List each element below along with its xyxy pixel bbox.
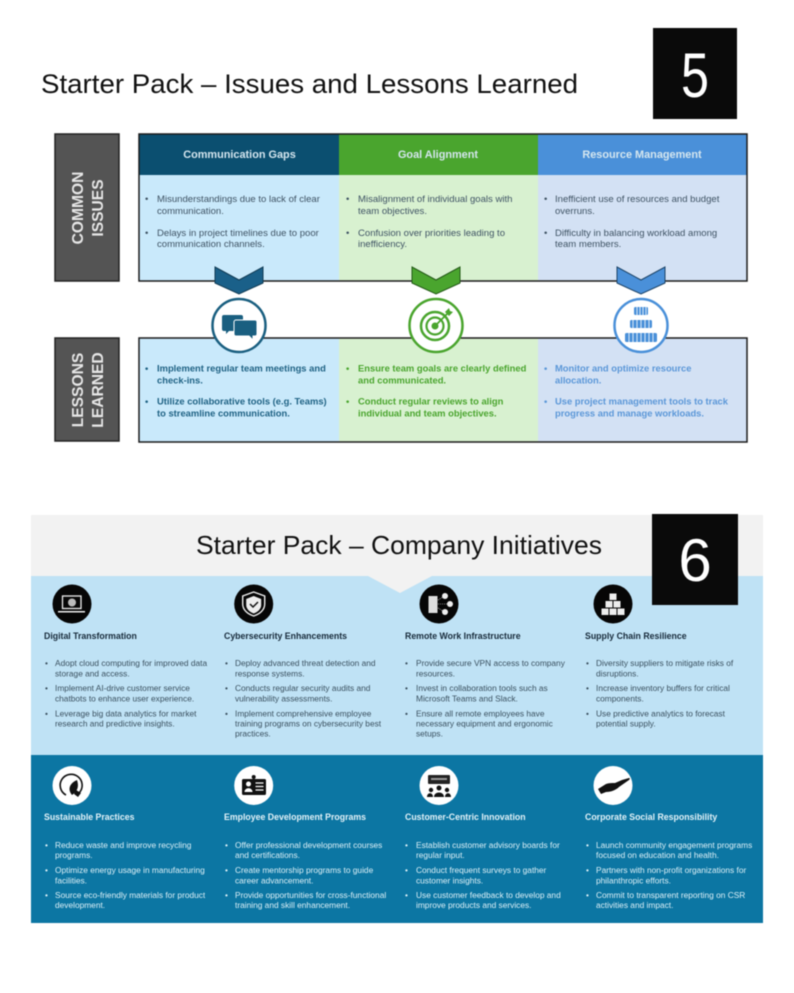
column: goal alignment: Misalignment of individual goals with xyxy=(358,194,512,205)
column: communication gaps: Misunderstandings due to lack of clear xyxy=(157,194,321,205)
panel: lessons learned side label: LESSONS xyxy=(70,353,87,427)
initiative: digital transformation: chatbots to enhance user experience. xyxy=(55,694,194,704)
number badge 5 xyxy=(653,28,737,119)
panel: common issues side label xyxy=(55,134,119,281)
initiative: sustainable practices: Reduce waste and improve recycling xyxy=(55,840,192,850)
initiative: employee development programs: Provide opportunities for cross-functional xyxy=(235,890,386,900)
initiative: remote work infrastructure: • xyxy=(405,658,408,668)
column: resource management: Resource Management xyxy=(582,149,702,161)
initiative: sustainable practices: Source eco-friendly materials for product xyxy=(55,890,206,900)
number badge 6 xyxy=(652,514,738,605)
column: goal alignment: • xyxy=(346,194,349,205)
initiative: digital transformation: research and predictive insights. xyxy=(55,718,175,728)
initiative: cybersecurity enhancements: training programs on cybersecurity best xyxy=(235,718,382,728)
panel: common issues side label: ISSUES xyxy=(90,179,107,237)
initiative: remote work infrastructure: • xyxy=(405,708,408,718)
initiative: sustainable practices: • xyxy=(45,840,48,850)
initiative: customer-centric innovation: Establish customer advisory boards for xyxy=(416,840,560,850)
column: resource management: • xyxy=(544,194,547,205)
initiative: employee development programs: training and skill enhancement. xyxy=(235,900,350,910)
column: communication lessons: check-ins. xyxy=(157,374,203,386)
initiative: supply chain resilience: Increase inventory buffers for critical xyxy=(596,683,730,693)
initiative: supply chain resilience: disruptions. xyxy=(596,668,639,678)
initiative: supply chain resilience: potential supply. xyxy=(596,718,656,728)
column: goal alignment: team objectives. xyxy=(358,206,427,217)
initiative: digital transformation: • xyxy=(45,708,48,718)
initiative: remote work infrastructure: Microsoft Teams and Slack. xyxy=(416,694,518,704)
panel: dark teal initiatives row xyxy=(31,755,763,923)
column: resource lessons: allocation. xyxy=(555,374,601,386)
initiative: corporate social responsibility: • xyxy=(586,840,589,850)
column: communication lessons: Utilize collaborative tools (e.g. Teams) xyxy=(157,396,327,406)
initiative: employee development programs: Employee Development Programs xyxy=(224,812,366,822)
initiative: remote work infrastructure: Ensure all remote employees have xyxy=(416,708,545,718)
initiative: employee development programs xyxy=(224,766,386,910)
column: goal lessons: individual and team objectives. xyxy=(358,408,497,418)
initiative: cybersecurity enhancements: • xyxy=(225,708,228,718)
initiative: supply chain resilience: Use predictive analytics to forecast xyxy=(596,708,726,718)
column: communication lessons: to streamline communication. xyxy=(157,408,290,418)
initiative: customer-centric innovation: Customer-Centric Innovation xyxy=(405,812,526,822)
initiative: supply chain resilience: • xyxy=(586,683,589,693)
initiative: cybersecurity enhancements: practices. xyxy=(235,728,271,738)
initiative: corporate social responsibility: activities and impact. xyxy=(596,900,673,910)
initiative: remote work infrastructure: resources. xyxy=(416,668,455,678)
initiative: sustainable practices: • xyxy=(45,865,48,875)
column: resource management: • xyxy=(544,228,547,239)
initiative: sustainable practices: programs. xyxy=(55,850,93,860)
panel: company initiatives header band xyxy=(31,515,763,576)
initiative: sustainable practices: facilities. xyxy=(55,876,87,886)
initiative: employee development programs: career advancement. xyxy=(235,876,313,886)
column: goal alignment xyxy=(339,134,538,281)
column: communication gaps: Delays in project timelines due to poor xyxy=(157,228,320,239)
initiative: cybersecurity enhancements: Conducts regular security audits and xyxy=(235,683,371,693)
initiative: supply chain resilience: • xyxy=(586,658,589,668)
column: resource lessons: Use project management tools to track xyxy=(555,396,729,406)
initiative: employee development programs: • xyxy=(225,840,228,850)
column: communication gaps: • xyxy=(145,194,148,205)
column: goal alignment: Goal Alignment xyxy=(398,149,478,161)
initiative: customer-centric innovation: regular input. xyxy=(416,850,465,860)
initiative: remote work infrastructure: necessary equipment and ergonomic xyxy=(416,718,553,728)
initiative: supply chain resilience xyxy=(585,584,734,728)
number badge 6: 6 xyxy=(678,527,712,594)
column: communication gaps: • xyxy=(145,228,148,239)
initiative: customer-centric innovation: improve products and services. xyxy=(416,900,531,910)
initiative: customer-centric innovation: • xyxy=(405,865,408,875)
initiative: remote work infrastructure: Invest in collaboration tools such as xyxy=(416,683,548,693)
column: resource lessons: • xyxy=(544,396,547,406)
column: goal lessons xyxy=(339,338,538,442)
initiative: supply chain resilience: • xyxy=(586,708,589,718)
initiative: corporate social responsibility: Launch community engagement programs xyxy=(596,840,752,850)
column: resource management: Inefficient use of resources and budget xyxy=(555,194,720,205)
column: resource lessons: Monitor and optimize resource xyxy=(555,362,691,374)
initiative: customer-centric innovation: Conduct frequent surveys to gather xyxy=(416,865,547,875)
column: goal alignment: Confusion over priorities leading to xyxy=(358,228,505,239)
title: issues and lessons learned: Starter Pack – Issues and Lessons Learned xyxy=(41,69,578,99)
initiative: sustainable practices xyxy=(44,766,206,910)
initiative: sustainable practices: • xyxy=(45,890,48,900)
column: communication lessons: • xyxy=(145,396,148,406)
column: goal lessons: Conduct regular reviews to align xyxy=(358,396,504,406)
number badge 5: 5 xyxy=(681,41,709,111)
column: goal alignment: inefficiency. xyxy=(358,239,407,250)
column: resource lessons xyxy=(538,338,747,442)
initiative: supply chain resilience: Supply Chain Resilience xyxy=(585,631,687,641)
column: communication gaps: communication. xyxy=(157,206,224,217)
initiative: digital transformation: storage and access. xyxy=(55,668,130,678)
initiative: cybersecurity enhancements: • xyxy=(225,658,228,668)
initiative: digital transformation: • xyxy=(45,683,48,693)
initiative: corporate social responsibility: • xyxy=(586,890,589,900)
initiative: digital transformation: • xyxy=(45,658,48,668)
initiative: customer-centric innovation: customer insights. xyxy=(416,876,483,886)
column: resource lessons: progress and manage workloads. xyxy=(555,408,704,418)
icon: chat bubbles xyxy=(212,299,266,352)
initiative: cybersecurity enhancements: • xyxy=(225,683,228,693)
title: company initiatives: Starter Pack – Company Initiatives xyxy=(196,530,602,560)
initiative: digital transformation: Implement AI-drive customer service xyxy=(55,683,190,693)
column: communication lessons xyxy=(139,338,340,442)
column: resource management: overruns. xyxy=(555,206,595,217)
column: goal lessons: • xyxy=(346,362,349,374)
initiative: customer-centric innovation xyxy=(405,766,561,910)
arrow: goal chevron xyxy=(412,267,460,294)
column: resource lessons: • xyxy=(544,362,547,374)
initiative: customer-centric innovation: • xyxy=(405,840,408,850)
panel: lessons learned side label xyxy=(55,338,119,441)
initiative: remote work infrastructure: Remote Work Infrastructure xyxy=(405,631,521,641)
initiative: employee development programs: Offer professional development courses xyxy=(235,840,382,850)
column: resource management: Difficulty in balancing workload among xyxy=(555,228,717,239)
icon: people pyramid xyxy=(614,299,668,352)
initiative: digital transformation: Adopt cloud computing for improved data xyxy=(55,658,207,668)
arrow: communication chevron xyxy=(215,267,263,294)
initiative: remote work infrastructure: • xyxy=(405,683,408,693)
initiative: sustainable practices: Sustainable Practices xyxy=(44,812,135,822)
column: communication lessons: Implement regular team meetings and xyxy=(157,362,326,374)
initiative: digital transformation: Digital Transformation xyxy=(44,631,137,641)
initiative: corporate social responsibility: • xyxy=(586,865,589,875)
initiative: corporate social responsibility: focused on education and health. xyxy=(596,850,719,860)
initiative: remote work infrastructure xyxy=(405,584,566,738)
initiative: employee development programs: and certifications. xyxy=(235,850,300,860)
initiative: digital transformation: Leverage big data analytics for market xyxy=(55,708,197,718)
initiative: customer-centric innovation: Use customer feedback to develop and xyxy=(416,890,561,900)
arrow: resource chevron xyxy=(617,267,665,294)
column: resource management: team members. xyxy=(555,239,621,250)
panel: lessons learned side label: LEARNED xyxy=(90,352,107,428)
initiative: cybersecurity enhancements: Implement comprehensive employee xyxy=(235,708,372,718)
initiative: supply chain resilience: components. xyxy=(596,694,644,704)
initiative: employee development programs: • xyxy=(225,865,228,875)
column: goal alignment: • xyxy=(346,228,349,239)
initiative: corporate social responsibility xyxy=(585,766,752,910)
initiative: employee development programs: Create mentorship programs to guide xyxy=(235,865,374,875)
panel: light blue initiatives row xyxy=(31,576,763,755)
column: resource management xyxy=(538,134,747,281)
initiative: corporate social responsibility: Commit to transparent reporting on CSR xyxy=(596,890,745,900)
initiative: cybersecurity enhancements: Deploy advanced threat detection and xyxy=(235,658,376,668)
column: goal lessons: • xyxy=(346,396,349,406)
initiative: remote work infrastructure: setups. xyxy=(416,728,443,738)
initiative: customer-centric innovation: • xyxy=(405,890,408,900)
column: communication gaps: Communication Gaps xyxy=(183,149,296,161)
initiative: cybersecurity enhancements: response systems. xyxy=(235,668,305,678)
initiative: employee development programs: • xyxy=(225,890,228,900)
column: goal lessons: and communicated. xyxy=(358,374,446,386)
initiative: digital transformation xyxy=(44,584,207,728)
panel: common issues side label: COMMON xyxy=(70,172,87,244)
initiative: corporate social responsibility: philanthropic efforts. xyxy=(596,876,671,886)
initiative: cybersecurity enhancements: vulnerability assessments. xyxy=(235,694,332,704)
panel: common issues table xyxy=(139,134,747,281)
initiative: sustainable practices: development. xyxy=(55,900,105,910)
column: goal lessons: Ensure team goals are clearly defined xyxy=(358,362,527,374)
initiative: remote work infrastructure: Provide secure VPN access to company xyxy=(416,658,566,668)
initiative: sustainable practices: Optimize energy usage in manufacturing xyxy=(55,865,205,875)
initiative: cybersecurity enhancements: Cybersecurity Enhancements xyxy=(224,631,347,641)
initiative: supply chain resilience: Diversity suppliers to mitigate risks of xyxy=(596,658,734,668)
column: communication gaps xyxy=(139,134,340,281)
column: communication gaps: communication channels. xyxy=(157,239,265,250)
initiative: corporate social responsibility: Corporate Social Responsibility xyxy=(585,812,717,822)
icon: target xyxy=(410,299,462,352)
column: communication lessons: • xyxy=(145,362,148,374)
panel: lessons learned table xyxy=(139,338,747,442)
initiative: corporate social responsibility: Partners with non-profit organizations for xyxy=(596,865,746,875)
initiative: cybersecurity enhancements xyxy=(224,584,382,738)
